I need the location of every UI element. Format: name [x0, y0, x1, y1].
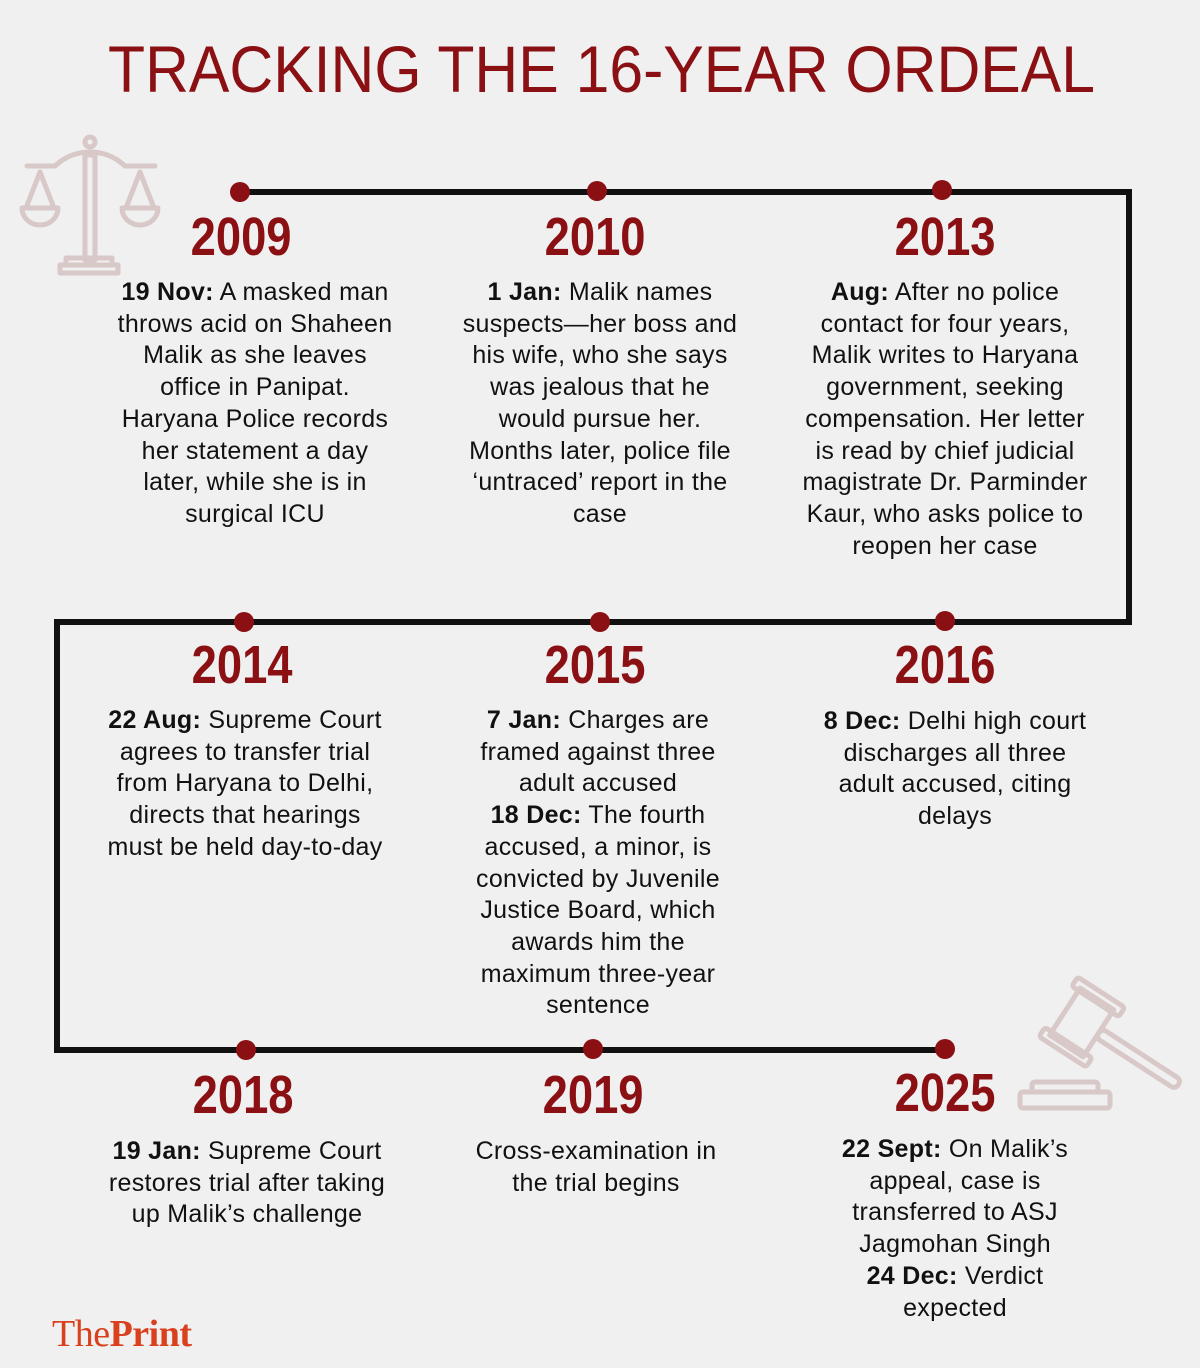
- text 2019: Cross-examination in: [476, 1137, 716, 1165]
- year 2010: 2010: [545, 207, 645, 267]
- text 2013: Aug: After no police: [831, 278, 1059, 306]
- text 2018: up Malik’s challenge: [132, 1200, 362, 1228]
- text 2013: compensation. Her letter: [805, 405, 1085, 433]
- text 2025: expected: [903, 1294, 1007, 1322]
- text 2015: framed against three: [480, 738, 716, 766]
- text 2018: restores trial after taking: [109, 1169, 385, 1197]
- text 2015: adult accused: [519, 769, 677, 797]
- year 2014: 2014: [192, 635, 292, 695]
- text 2010: his wife, who she says: [472, 341, 728, 369]
- text 2015: accused, a minor, is: [485, 833, 711, 861]
- text 2014: 22 Aug: Supreme Court: [108, 706, 382, 734]
- text 2013: government, seeking: [826, 373, 1064, 401]
- text 2014: must be held day-to-day: [107, 833, 383, 861]
- title: TRACKING THE 16-YEAR ORDEAL: [108, 32, 1095, 106]
- text 2015: [476, 706, 720, 1019]
- year 2018: 2018: [193, 1065, 293, 1125]
- year 2013: 2013: [895, 207, 995, 267]
- text 2010: would pursue her.: [499, 405, 701, 433]
- text 2015: convicted by Juvenile: [476, 865, 720, 893]
- text 2015: sentence: [546, 991, 650, 1019]
- text 2009: throws acid on Shaheen: [118, 310, 392, 338]
- text 2009: surgical ICU: [185, 500, 325, 528]
- text 2016: delays: [918, 802, 992, 830]
- text 2009: [118, 278, 392, 528]
- text 2009: 19 Nov: A masked man: [121, 278, 389, 306]
- text 2015: awards him the: [511, 928, 685, 956]
- text 2025: Jagmohan Singh: [859, 1230, 1051, 1258]
- year 2015: 2015: [545, 635, 645, 695]
- text 2010: ‘untraced’ report in the: [472, 468, 728, 496]
- year 2016: 2016: [895, 635, 995, 695]
- text 2010: suspects—her boss and: [463, 310, 737, 338]
- text 2018: 19 Jan: Supreme Court: [113, 1137, 381, 1165]
- year 2009: 2009: [191, 207, 291, 267]
- text 2025: appeal, case is: [869, 1167, 1041, 1195]
- text 2010: Months later, police file: [469, 437, 731, 465]
- icon: scales of justice: [20, 134, 160, 276]
- text 2010: [463, 278, 737, 528]
- text 2013: Kaur, who asks police to: [807, 500, 1083, 528]
- text 2010: was jealous that he: [490, 373, 710, 401]
- text 2014: agrees to transfer trial: [120, 738, 370, 766]
- text 2025: 24 Dec: Verdict: [867, 1262, 1043, 1290]
- text 2018: [109, 1137, 385, 1228]
- text 2015: maximum three-year: [481, 960, 715, 988]
- text 2016: adult accused, citing: [839, 770, 1071, 798]
- text 2009: Malik as she leaves: [143, 341, 367, 369]
- text 2014: [107, 706, 383, 861]
- text 2013: contact for four years,: [821, 310, 1069, 338]
- logo: ThePrint: ThePrint: [52, 1313, 192, 1355]
- text 2014: from Haryana to Delhi,: [117, 769, 373, 797]
- text 2009: her statement a day: [142, 437, 368, 465]
- text 2009: Haryana Police records: [122, 405, 388, 433]
- text 2019: the trial begins: [512, 1169, 680, 1197]
- text 2013: Malik writes to Haryana: [812, 341, 1078, 369]
- text 2013: [802, 278, 1088, 560]
- year 2019: 2019: [543, 1065, 643, 1125]
- text 2015: 18 Dec: The fourth: [491, 801, 705, 829]
- year 2025: 2025: [895, 1063, 995, 1123]
- text 2016: [824, 707, 1086, 830]
- text 2010: 1 Jan: Malik names: [488, 278, 712, 306]
- text 2014: directs that hearings: [129, 801, 361, 829]
- text 2025: 22 Sept: On Malik’s: [842, 1135, 1068, 1163]
- text 2016: discharges all three: [844, 739, 1066, 767]
- text 2009: later, while she is in: [143, 468, 367, 496]
- text 2019: [476, 1137, 716, 1197]
- text 2025: [842, 1135, 1068, 1322]
- text 2015: Justice Board, which: [480, 896, 716, 924]
- text 2013: is read by chief judicial: [815, 437, 1074, 465]
- text 2010: case: [573, 500, 627, 528]
- text 2015: 7 Jan: Charges are: [487, 706, 709, 734]
- text 2016: 8 Dec: Delhi high court: [824, 707, 1086, 735]
- text 2009: office in Panipat.: [160, 373, 350, 401]
- text 2025: transferred to ASJ: [852, 1198, 1058, 1226]
- text 2013: reopen her case: [852, 532, 1038, 560]
- text 2013: magistrate Dr. Parminder: [802, 468, 1088, 496]
